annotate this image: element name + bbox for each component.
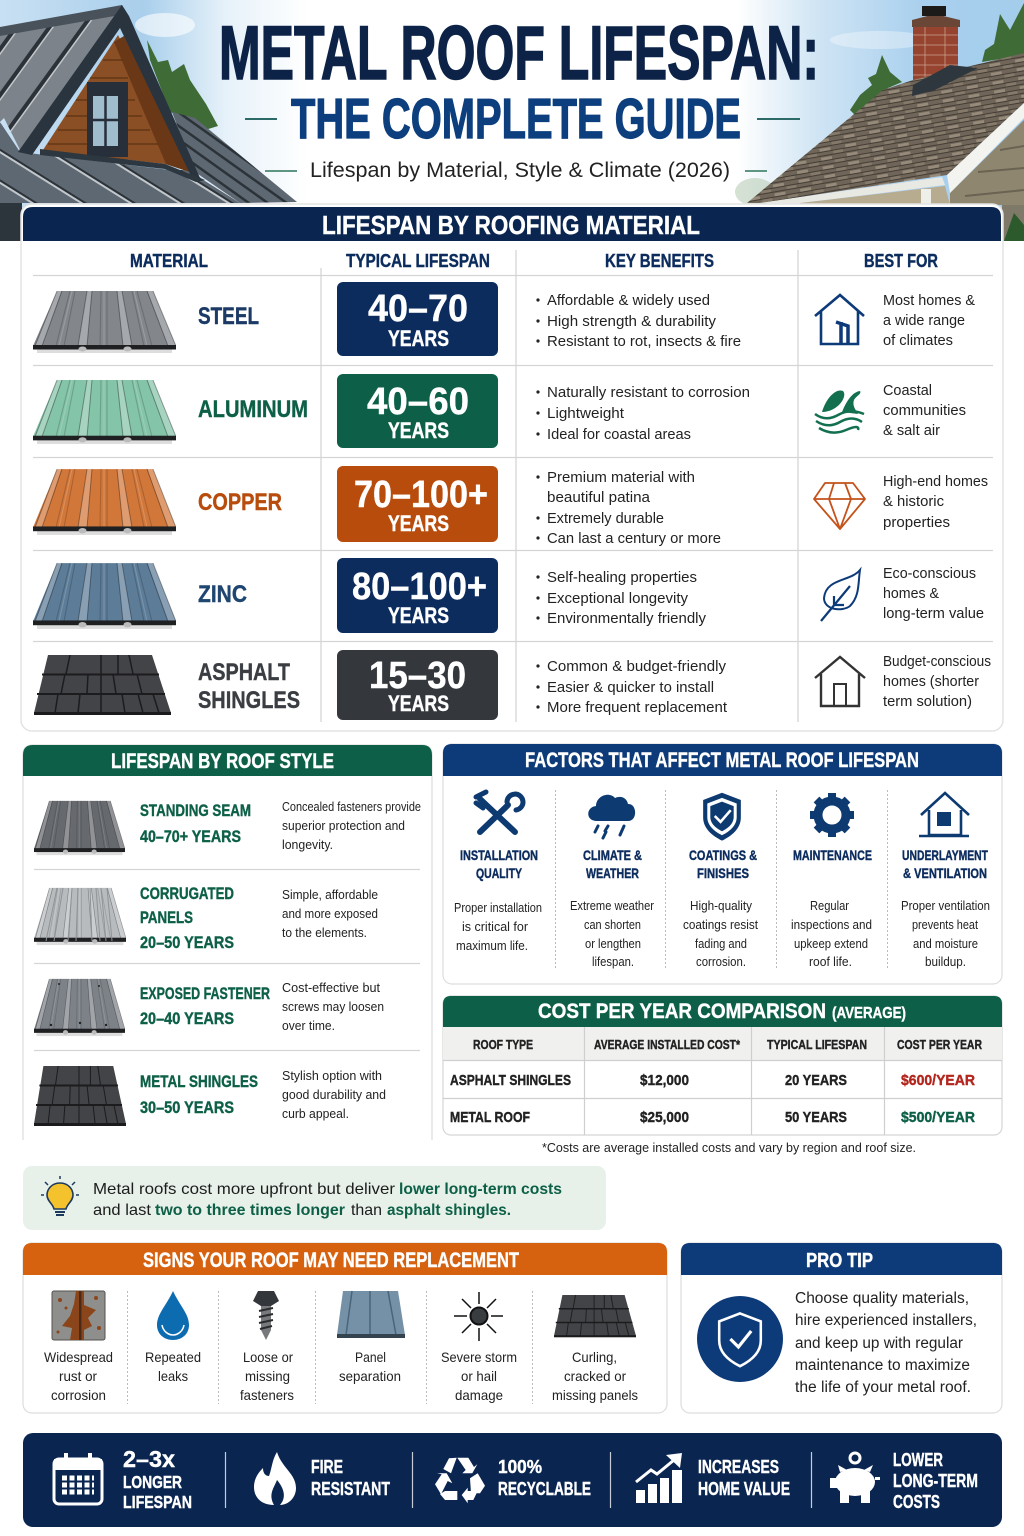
style: metal shingles: Stylish option with	[282, 1068, 382, 1083]
sign: panel separation: Panel	[355, 1349, 386, 1365]
factor: climate and weather	[570, 795, 655, 969]
tagline: Lifespan by Material, Style & Climate (2026)	[310, 159, 730, 182]
benefit: lower costs: COSTS	[893, 1492, 940, 1512]
benefit: lower costs: LOWER	[893, 1450, 943, 1470]
icon: house with vent	[919, 793, 969, 836]
icon: shield check	[697, 1296, 783, 1382]
table header: TYPICAL LIFESPAN	[767, 1037, 867, 1052]
factor: underlayment and ventilation: Proper ventilation	[901, 898, 990, 913]
row: asphalt shingles: 15–30	[369, 655, 466, 697]
tip text: maintenance to maximize	[795, 1357, 970, 1374]
tip text: and keep up with regular	[795, 1335, 963, 1352]
column headers	[130, 251, 938, 271]
style: corrugated panels: Simple, affordable	[282, 887, 378, 902]
factor: maintenance: upkeep extend	[794, 936, 868, 951]
benefit: recyclable: 100%	[498, 1457, 542, 1477]
style: corrugated panels: and more exposed	[282, 906, 378, 921]
row: asphalt: $600/YEAR	[901, 1072, 975, 1089]
icon: recycle	[435, 1458, 485, 1503]
factor: underlayment and ventilation: and moisture	[913, 936, 978, 951]
heading: COST PER YEAR COMPARISON	[538, 1000, 826, 1023]
row: asphalt shingles: Easier & quicker to install	[547, 679, 714, 696]
row: copper: Premium material with	[547, 469, 695, 486]
callout: asphalt shingles.	[387, 1202, 511, 1219]
sign: panel separation	[337, 1291, 405, 1384]
row: asphalt shingles: homes (shorter	[883, 674, 979, 690]
sign: leaks: Repeated	[145, 1349, 201, 1365]
row: asphalt: 20 YEARS	[785, 1072, 847, 1089]
benefit: fire resistant: RESISTANT	[311, 1479, 390, 1499]
icon: rain cloud	[588, 795, 635, 838]
style: metal shingles	[34, 1066, 386, 1126]
icon: light bulb	[41, 1176, 79, 1215]
style: standing seam: Concealed fasteners provide	[282, 799, 421, 814]
factor: climate and weather: Extreme weather	[570, 898, 655, 913]
style: exposed fastener: 20–40 YEARS	[140, 1009, 234, 1028]
factor: coatings and finishes: COATINGS &	[689, 848, 757, 863]
row: asphalt shingles	[34, 650, 991, 720]
row: metal roof: $500/YEAR	[901, 1109, 975, 1126]
row: copper: High-end homes	[883, 474, 988, 490]
icon: shield	[703, 793, 741, 841]
panel: pro tip	[681, 1243, 1002, 1413]
sign: panel separation: separation	[339, 1368, 401, 1384]
factor: coatings and finishes: corrosion.	[696, 954, 746, 969]
row: zinc: Environmentally friendly	[547, 610, 706, 627]
icon: waves	[815, 390, 864, 433]
benefit: home value: HOME VALUE	[698, 1479, 790, 1499]
row: zinc: Self-healing properties	[547, 569, 697, 586]
row: aluminum	[33, 374, 966, 448]
row: steel: STEEL	[198, 303, 259, 330]
row: asphalt	[450, 1072, 975, 1089]
style: corrugated panels: 20–50 YEARS	[140, 933, 234, 952]
row: metal roof: METAL ROOF	[450, 1109, 530, 1126]
style: standing seam: 40–70+ YEARS	[140, 827, 241, 846]
row: steel: YEARS	[388, 326, 449, 351]
row: zinc: Exceptional longevity	[547, 590, 688, 607]
sign: rust	[44, 1291, 113, 1403]
right house: shingle roof and chimney	[747, 6, 1024, 205]
title	[219, 11, 819, 182]
callout	[23, 1166, 606, 1230]
sign: curling shingles: Curling,	[572, 1349, 617, 1365]
footnote: *Costs are average installed costs and vary by region and roof size.	[542, 1140, 916, 1155]
row: zinc: homes &	[883, 586, 939, 602]
row: steel: Resistant to rot, insects & fire	[547, 333, 741, 350]
row: metal roof: $25,000	[640, 1109, 689, 1126]
icon: tools	[476, 792, 523, 832]
style: exposed fastener	[34, 978, 384, 1036]
row: asphalt: ASPHALT SHINGLES	[450, 1072, 571, 1089]
factor: maintenance	[791, 793, 872, 969]
icon: piggy bank	[830, 1453, 880, 1503]
benefit: lower costs: LONG-TERM	[893, 1471, 978, 1491]
hero background	[0, 0, 1024, 241]
sign: fasteners: Loose or	[243, 1349, 293, 1365]
row: steel: 40–70	[368, 288, 468, 330]
icon: outline house	[815, 657, 865, 706]
row: asphalt: $12,000	[640, 1072, 689, 1089]
sign: storm damage	[441, 1292, 517, 1403]
icon: leaf	[821, 570, 860, 621]
icon: calendar	[54, 1453, 102, 1504]
sign: storm damage: or hail	[461, 1368, 497, 1384]
heading: PRO TIP	[806, 1250, 873, 1272]
table header: ROOF TYPE	[473, 1037, 533, 1052]
factor: underlayment and ventilation	[901, 793, 990, 969]
factor: maintenance: Regular	[810, 898, 850, 913]
factor: installation quality: maximum life.	[456, 938, 528, 953]
row: metal roof	[450, 1109, 975, 1126]
factor: maintenance: inspections and	[791, 917, 872, 932]
factor: climate and weather: WEATHER	[586, 866, 639, 881]
sign: curling shingles: missing panels	[552, 1387, 638, 1403]
sign: storm damage: Severe storm	[441, 1349, 517, 1365]
factor: installation quality	[454, 792, 542, 953]
style: corrugated panels	[34, 884, 378, 952]
benefit: longer lifespan	[54, 1446, 192, 1512]
factor: coatings and finishes: High-quality	[690, 898, 752, 913]
callout: than	[351, 1202, 382, 1219]
heading: FACTORS THAT AFFECT METAL ROOF LIFESPAN	[525, 749, 919, 772]
style: corrugated panels: to the elements.	[282, 925, 367, 940]
row: steel: a wide range	[883, 313, 965, 329]
row: zinc: long-term value	[883, 606, 984, 622]
sign: fasteners	[240, 1291, 294, 1403]
row: copper: properties	[883, 515, 950, 531]
row: copper: COPPER	[198, 489, 282, 516]
style: corrugated panels: PANELS	[140, 908, 193, 927]
style: metal shingles: good durability and	[282, 1087, 386, 1102]
table header: COST PER YEAR	[897, 1037, 982, 1052]
heading: SIGNS YOUR ROOF MAY NEED REPLACEMENT	[143, 1249, 519, 1272]
benefit: home value: INCREASES	[698, 1457, 779, 1477]
row: copper: 70–100+	[354, 474, 488, 516]
row: steel	[33, 282, 975, 356]
style: metal shingles: METAL SHINGLES	[140, 1072, 258, 1091]
factor: underlayment and ventilation: & VENTILATION	[903, 866, 987, 881]
row: aluminum: YEARS	[388, 418, 449, 443]
table header: AVERAGE INSTALLED COST*	[594, 1037, 741, 1052]
trees behind houses	[147, 3, 1024, 130]
panel: factors	[443, 744, 1002, 984]
sign: leaks	[145, 1291, 201, 1384]
sign: storm damage: damage	[455, 1387, 503, 1403]
callout: Metal roofs cost more upfront but deliver	[93, 1181, 396, 1198]
factor: underlayment and ventilation: prevents heat	[912, 917, 978, 932]
factor: climate and weather: CLIMATE &	[583, 848, 642, 863]
table header	[473, 1037, 982, 1052]
row: steel: Affordable & widely used	[547, 292, 710, 309]
row: aluminum: Ideal for coastal areas	[547, 426, 691, 443]
row: zinc: ZINC	[198, 581, 247, 608]
heading: LIFESPAN BY ROOFING MATERIAL	[322, 210, 700, 240]
heading: (AVERAGE)	[832, 1005, 906, 1022]
style: standing seam: STANDING SEAM	[140, 801, 251, 820]
style: corrugated panels: CORRUGATED	[140, 884, 234, 903]
row: asphalt shingles: ASPHALT	[198, 659, 290, 686]
benefit: recyclable	[435, 1457, 591, 1503]
sign: rust: Widespread	[44, 1349, 113, 1365]
column headers: KEY BENEFITS	[605, 251, 714, 271]
sign: rust: rust or	[59, 1368, 97, 1384]
benefit: longer lifespan: 2–3x	[123, 1446, 175, 1472]
panel: cost per year comparison	[443, 996, 1002, 1135]
factor: climate and weather: lifespan.	[592, 954, 634, 969]
panel: signs of replacement	[23, 1243, 667, 1413]
sign: curling shingles	[552, 1295, 638, 1403]
row: aluminum: Naturally resistant to corrosion	[547, 384, 750, 401]
style: exposed fastener: Cost-effective but	[282, 980, 380, 995]
row: metal roof: 50 YEARS	[785, 1109, 847, 1126]
row: aluminum: & salt air	[883, 423, 940, 439]
benefit: home value	[636, 1453, 790, 1503]
style: metal shingles: 30–50 YEARS	[140, 1098, 234, 1117]
factor: installation quality: INSTALLATION	[460, 848, 538, 863]
icon: house	[815, 295, 864, 344]
row: copper: YEARS	[388, 511, 449, 536]
column headers: BEST FOR	[864, 251, 938, 271]
row: aluminum: Coastal	[883, 383, 932, 399]
factor: climate and weather: can shorten	[584, 917, 641, 932]
row: copper	[33, 466, 988, 547]
style: exposed fastener: screws may loosen	[282, 999, 384, 1014]
column headers: TYPICAL LIFESPAN	[346, 251, 490, 271]
row: aluminum: ALUMINUM	[198, 396, 308, 423]
row: asphalt shingles: SHINGLES	[198, 687, 300, 714]
factor: maintenance: roof life.	[809, 954, 852, 969]
sign: fasteners: fasteners	[240, 1387, 294, 1403]
icon: flame	[254, 1452, 296, 1505]
factor: maintenance: MAINTENANCE	[793, 848, 872, 863]
factor: coatings and finishes: fading and	[695, 936, 747, 951]
row: aluminum: Lightweight	[547, 405, 625, 422]
style: standing seam: longevity.	[282, 837, 333, 852]
sign: fasteners: missing	[245, 1368, 290, 1384]
panel: lifespan by roof style	[23, 745, 432, 1140]
row: asphalt shingles: term solution)	[883, 694, 972, 710]
row: zinc	[33, 558, 984, 633]
factor: installation quality: Proper installation	[454, 900, 542, 915]
row: copper: Can last a century or more	[547, 530, 721, 547]
row: aluminum: communities	[883, 403, 966, 419]
benefit: longer lifespan: LIFESPAN	[123, 1492, 192, 1512]
row: asphalt shingles: More frequent replacement	[547, 699, 728, 716]
tip text: hire experienced installers,	[795, 1312, 977, 1329]
row: steel: High strength & durability	[547, 313, 716, 330]
style: standing seam	[34, 799, 421, 855]
row: asphalt shingles: Budget-conscious	[883, 654, 991, 670]
callout: two to three times longer	[155, 1202, 345, 1219]
row: copper: beautiful patina	[547, 489, 651, 506]
row: steel: of climates	[883, 333, 953, 349]
benefit: longer lifespan: LONGER	[123, 1472, 182, 1492]
style: metal shingles: curb appeal.	[282, 1106, 349, 1121]
style: standing seam: superior protection and	[282, 818, 405, 833]
factor: installation quality: QUALITY	[476, 866, 522, 881]
row: copper: & historic	[883, 494, 944, 510]
factor: coatings and finishes: FINISHES	[697, 866, 749, 881]
row: steel: Most homes &	[883, 293, 975, 309]
row: zinc: 80–100+	[352, 566, 487, 608]
factor: coatings and finishes: coatings resist	[683, 917, 758, 932]
callout: and last	[93, 1202, 152, 1219]
heading: LIFESPAN BY ROOF STYLE	[111, 750, 334, 773]
column headers: MATERIAL	[130, 251, 208, 271]
row: zinc: Eco-conscious	[883, 566, 976, 582]
panel: benefits bar	[23, 1433, 1002, 1527]
subtitle line: THE COMPLETE GUIDE	[291, 87, 741, 151]
row: asphalt shingles: Common & budget-friendly	[547, 658, 726, 675]
style: exposed fastener: EXPOSED FASTENER	[140, 984, 270, 1003]
benefit: fire resistant	[254, 1452, 390, 1505]
factor: underlayment and ventilation: buildup.	[925, 954, 966, 969]
factor: coatings and finishes	[683, 793, 758, 969]
callout: lower long-term costs	[399, 1181, 562, 1198]
factor: installation quality: is critical for	[462, 919, 529, 934]
left house: metal roof and dormer	[0, 5, 297, 203]
row: zinc: YEARS	[388, 603, 449, 628]
tip text	[795, 1290, 977, 1396]
benefit: recyclable: RECYCLABLE	[498, 1479, 591, 1499]
panel: lifespan by roofing material	[21, 204, 1003, 731]
row: asphalt shingles: YEARS	[388, 691, 449, 716]
sign: curling shingles: cracked or	[564, 1368, 626, 1384]
row: copper: Extremely durable	[547, 510, 664, 527]
tip text: Choose quality materials,	[795, 1290, 969, 1307]
tip text: the life of your metal roof.	[795, 1379, 971, 1396]
icon: growth chart	[636, 1453, 682, 1503]
sign: rust: corrosion	[51, 1387, 106, 1403]
benefit: fire resistant: FIRE	[311, 1457, 343, 1477]
icon: diamond	[814, 483, 865, 529]
icon: gear	[810, 793, 854, 837]
row: aluminum: 40–60	[367, 381, 469, 423]
factor: underlayment and ventilation: UNDERLAYMENT	[902, 848, 989, 863]
factor: climate and weather: or lengthen	[585, 936, 641, 951]
benefit: lower costs	[830, 1450, 978, 1512]
style: exposed fastener: over time.	[282, 1018, 335, 1033]
sign: leaks: leaks	[158, 1368, 188, 1384]
